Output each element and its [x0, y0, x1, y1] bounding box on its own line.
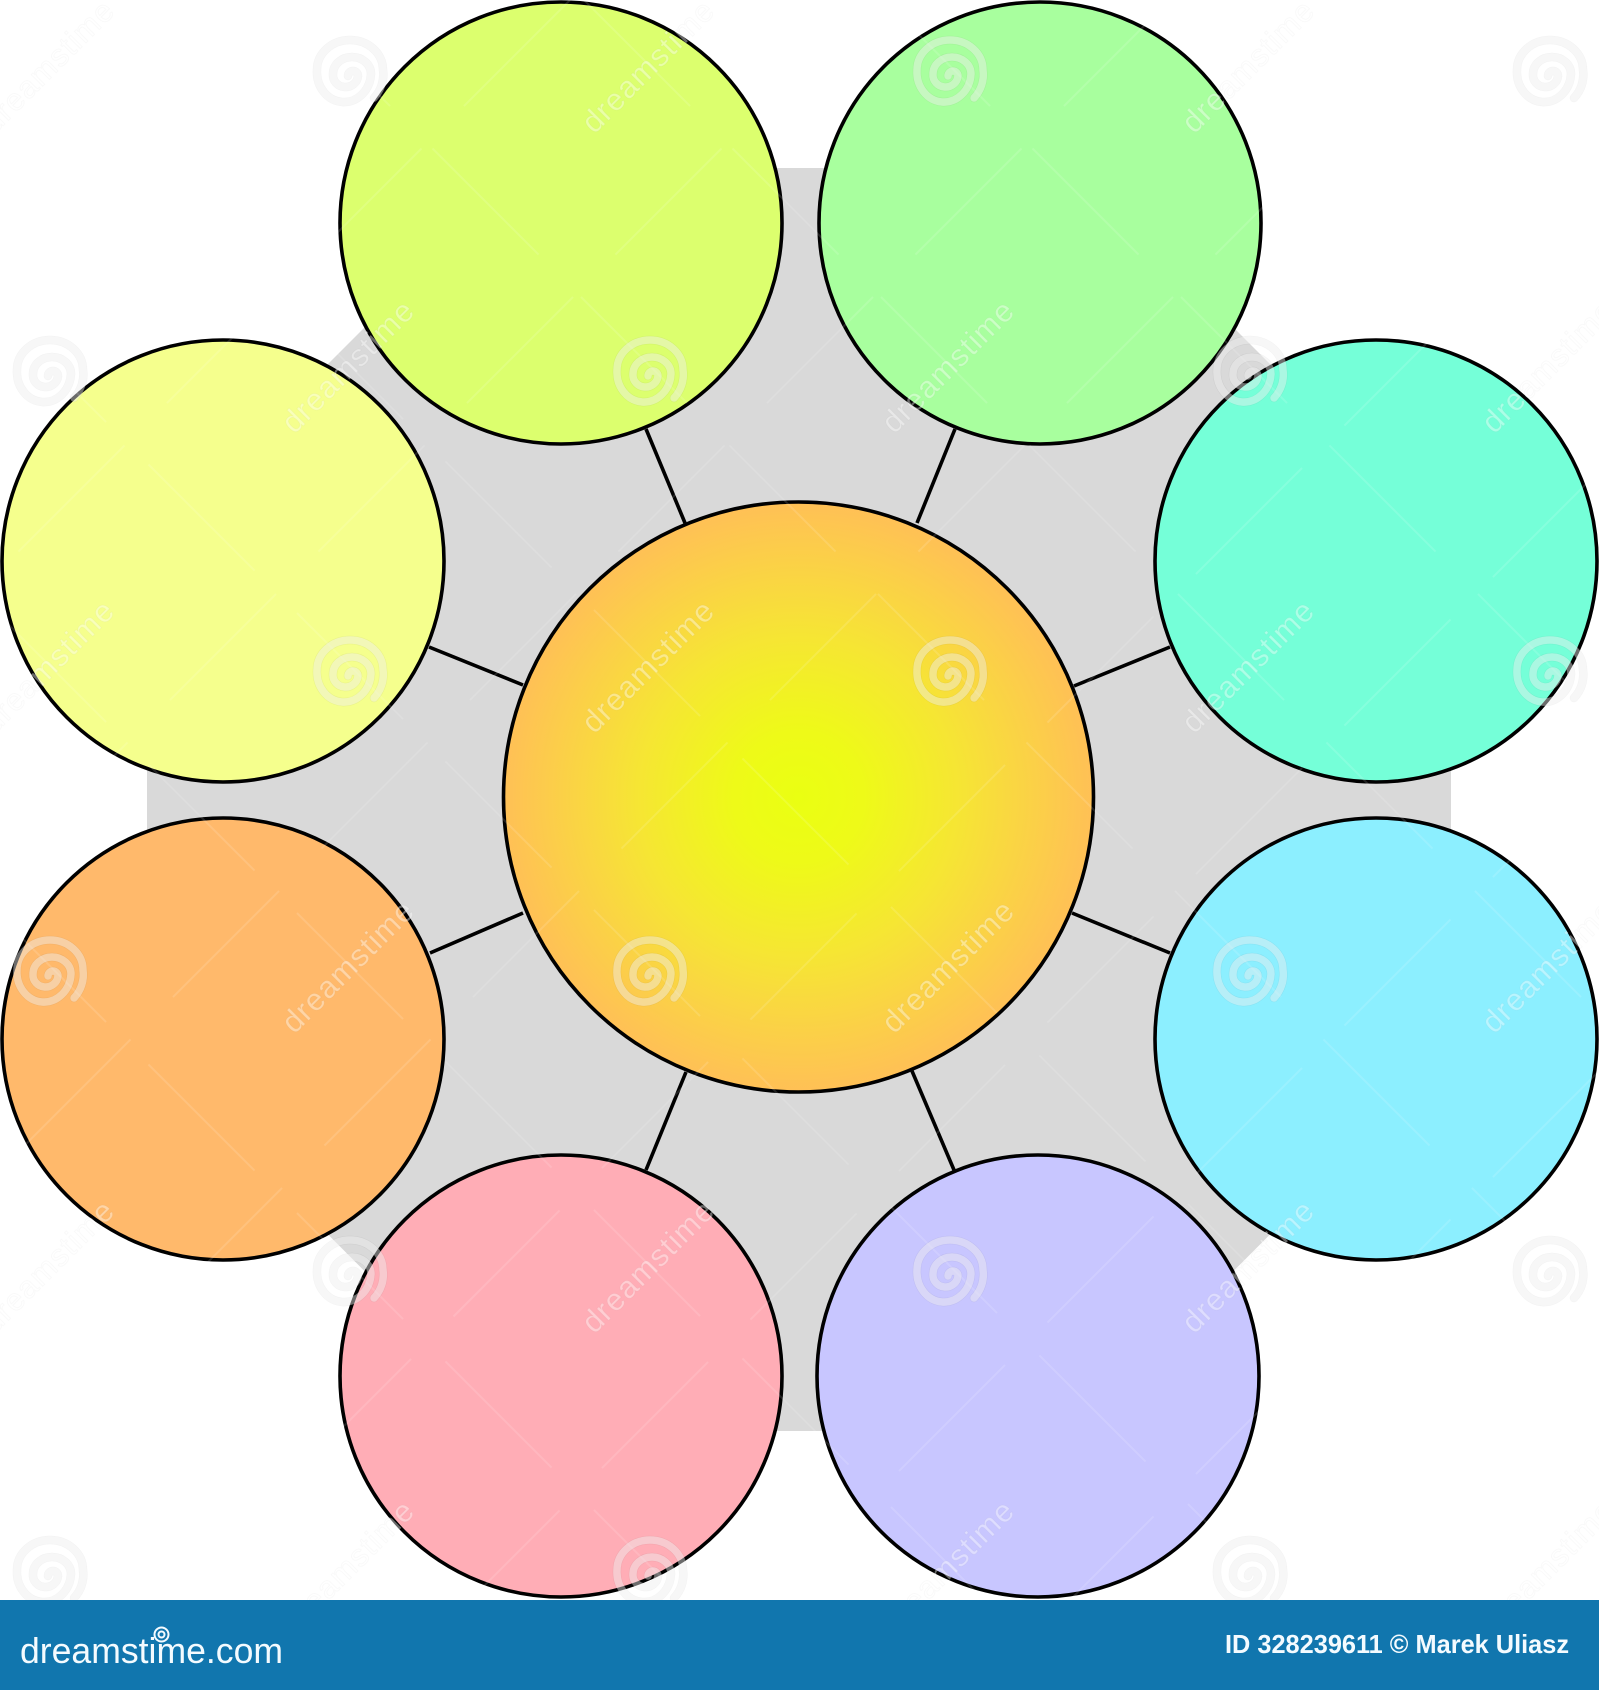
- watermark: dreamstime text: dreamstime: [574, 1193, 721, 1340]
- watermark: dreamstime text: dreamstime: [874, 1493, 1021, 1640]
- circle: bottom left, pink: [340, 1155, 782, 1597]
- watermark: dreamstime text: dreamstime: [574, 593, 721, 740]
- background octagon: [147, 168, 1451, 1431]
- circle: lower right, sky blue: [1155, 818, 1597, 1260]
- watermark: dreamstime text: dreamstime: [1174, 593, 1321, 740]
- circle: upper left, pale yellow: [2, 340, 444, 782]
- circle: bottom right, lavender: [817, 1155, 1259, 1597]
- circle: top left, lime: [340, 2, 782, 444]
- watermark: dreamstime text: dreamstime: [274, 893, 421, 1040]
- footer credit text: ID 328239611 © Marek Uliasz: [1225, 1629, 1569, 1659]
- watermark: dreamstime text: dreamstime: [874, 893, 1021, 1040]
- footer logo text: dreamstime.com: [20, 1630, 283, 1671]
- central circle: [504, 502, 1094, 1092]
- circle: upper right, aqua: [1155, 340, 1597, 782]
- watermark: dreamstime text: dreamstime: [274, 1493, 421, 1640]
- footer logo spiral icon: [154, 1628, 168, 1642]
- watermark: dreamstime text: dreamstime: [874, 293, 1021, 440]
- footer banner: [0, 1600, 1599, 1690]
- circle: lower left, orange: [2, 818, 444, 1260]
- circle: top right, green: [819, 2, 1261, 444]
- connector spokes: [429, 429, 1170, 1170]
- watermark: dreamstime text: dreamstime: [274, 293, 421, 440]
- watermark: dreamstime text: dreamstime: [1174, 1193, 1321, 1340]
